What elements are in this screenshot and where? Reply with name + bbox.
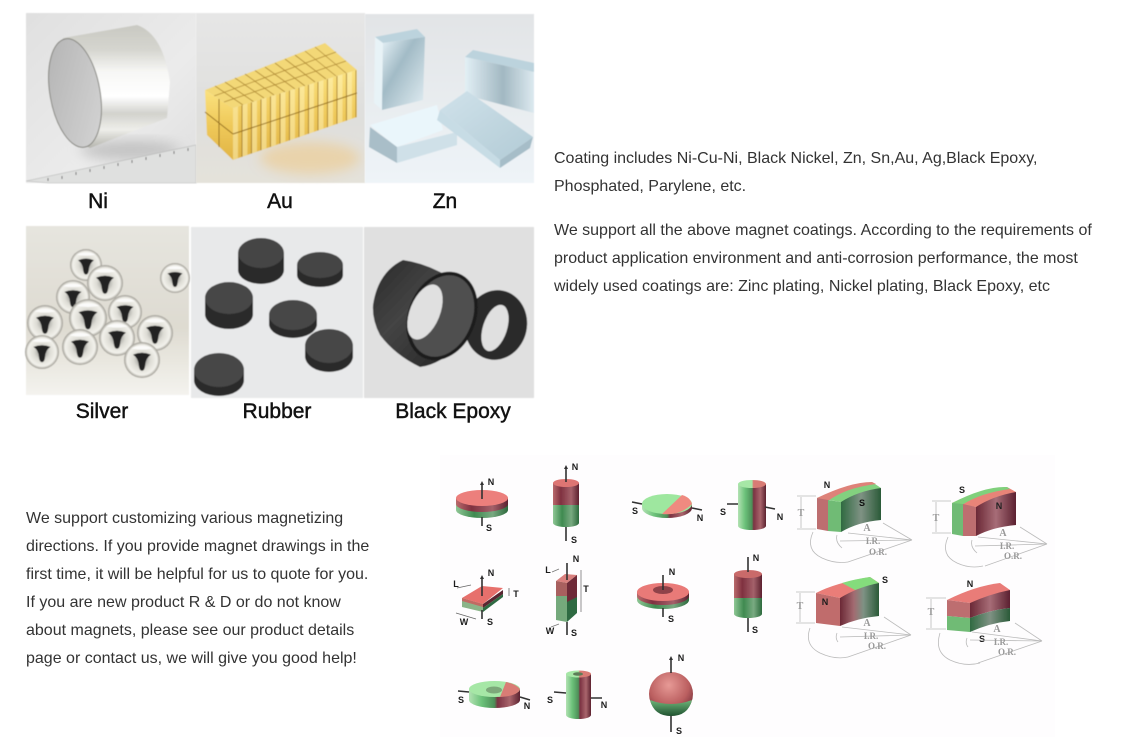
diagram: tall block: T [583,584,589,594]
text block: magnetizing directions: If you are new product R & D or do not know [26,594,341,611]
panel: coating photo Black Epoxy [364,227,534,398]
text block: coating support: product application environment and anti-corrosion performance, the most [554,250,1078,267]
diagram: arc segment S-N side: S [959,485,965,495]
icon: large epoxy ring [373,260,488,369]
diagram: arc segment S-N side: A [999,528,1007,539]
diagram: diametrical cylinder: S [720,507,726,517]
text block: coating list: Phosphated, Parylene, etc. [554,178,746,195]
diagram: diametrical ring: N [524,701,530,711]
icon: nickel cylinder magnet [41,25,170,152]
text block: coating list [554,150,1037,195]
diagram: arc segment N-S side: O.R. [869,547,887,557]
diagram: axial tube: S [752,625,758,635]
diagram: tall block: L [545,565,551,575]
diagram: axial ring [637,567,689,624]
icon: ruler [26,145,196,183]
diagram: arc segment S-N side: T [933,513,940,524]
diagram: tall block: W [546,626,555,636]
diagram: arc segment N-S length: S [882,575,888,585]
diagram: diametrical tube [547,670,607,719]
icon: small epoxy ring [458,284,534,366]
diagram: diametrical cylinder [720,480,783,530]
diagram: diametrical disc: S [632,506,638,516]
label: Zn: Zn [433,190,457,213]
diagram: tall block: N [573,554,579,564]
diagram: arc segment N-S length: A [863,618,871,629]
diagram: arc segment axial: O.R. [998,647,1016,657]
panel: coating photo Ni [26,13,196,183]
text block: magnetizing directions: directions. If you provide magnet drawings in the [26,538,369,555]
diagram: diametrical ring [458,681,530,711]
diagram: sphere [649,653,693,736]
label: Silver: Silver [76,400,128,423]
diagram: sphere: S [676,726,682,736]
diagram: diametrical cylinder: N [777,512,783,522]
text block: magnetizing directions: We support customizing various magnetizing [26,510,343,527]
diagram: axial tube [734,553,762,635]
diagram: arc segment N-S side: A [863,523,871,534]
diagram: arc segment S-N side [932,485,1047,567]
diagram: diametrical tube: S [547,695,553,705]
panel: magnetizing direction diagrams [440,455,1055,737]
text block: magnetizing directions: page or contact us, we will give you good help! [26,650,357,667]
diagram: arc segment axial: S [979,634,985,644]
text block: magnetizing directions: first time, it will be helpful for us to quote for you. [26,566,368,583]
diagram: block thickness [453,568,519,627]
diagram: axial disc [456,477,508,533]
icon: rubber discs [194,238,353,396]
label: Au: Au [267,190,293,213]
diagram: arc segment axial: T [928,607,935,618]
diagram: arc segment S-N side: O.R. [1004,551,1022,561]
diagram: arc segment S-N side: I.R. [1000,541,1014,551]
text block: coating list: Coating includes Ni-Cu-Ni, Black Nickel, Zn, Sn,Au, Ag,Black Epoxy, [554,150,1037,167]
diagram: axial disc: N [488,477,494,487]
label: Rubber: Rubber [243,400,311,423]
diagram: arc segment N-S length: T [797,601,804,612]
diagram: axial disc: S [486,523,492,533]
diagram: arc segment axial [926,579,1042,664]
diagram: axial cylinder: S [571,535,577,545]
diagram: block thickness: N [488,568,494,578]
diagram: diametrical tube: N [601,700,607,710]
diagram: axial ring: N [669,567,675,577]
text block: coating support [554,222,1092,295]
diagram: arc segment N-S side: N [824,480,830,490]
diagram: arc segment S-N side: N [996,501,1002,511]
diagram: axial cylinder: N [572,462,578,472]
icon: zinc blocks [369,29,534,168]
icon: silver balls [25,249,190,378]
diagram: block thickness: W [460,617,469,627]
diagram: arc segment axial: A [993,624,1001,635]
diagram: diametrical disc [632,494,703,523]
diagram: arc segment axial: I.R. [994,637,1008,647]
diagram: arc segment N-S length: O.R. [868,641,886,651]
diagram: sphere: N [678,653,684,663]
diagram: arc segment N-S side [797,480,912,562]
text block: coating support: widely used coatings are: Zinc plating, Nickel plating, Black Epoxy, etc [554,278,1050,295]
text block: magnetizing directions: about magnets, please see our product details [26,622,354,639]
diagram: arc segment N-S side: T [798,508,805,519]
text block: magnetizing directions [26,510,369,667]
diagram: diametrical ring: S [458,695,464,705]
panel: coating photo Silver [25,226,190,395]
diagram: axial cylinder [553,462,579,545]
diagram: axial ring: S [668,614,674,624]
diagram: block thickness: S [487,617,493,627]
diagram: block thickness: L [453,579,459,589]
diagram: arc segment N-S side: I.R. [866,536,880,546]
panel: coating photo Zn [365,14,534,183]
diagram: tall block [545,554,589,638]
diagram: axial tube: N [753,553,759,563]
label: Ni: Ni [88,190,108,213]
diagram: arc segment axial: N [967,579,973,589]
icon: gold block stack [205,43,357,160]
diagram: arc segment N-S length: N [822,597,828,607]
panel: coating photo Rubber [191,227,363,398]
diagram: block thickness: T [513,589,519,599]
panel: coating photo Au [196,13,365,183]
label: Black Epoxy: Black Epoxy [395,400,511,423]
diagram: arc segment N-S length [796,575,911,658]
text block: coating support: We support all the above magnet coatings. According to the requirements of [554,222,1092,239]
diagram: tall block: S [571,628,577,638]
diagram: diametrical disc: N [697,513,703,523]
diagram: arc segment N-S length: I.R. [864,631,878,641]
diagram: arc segment N-S side: S [859,498,865,508]
